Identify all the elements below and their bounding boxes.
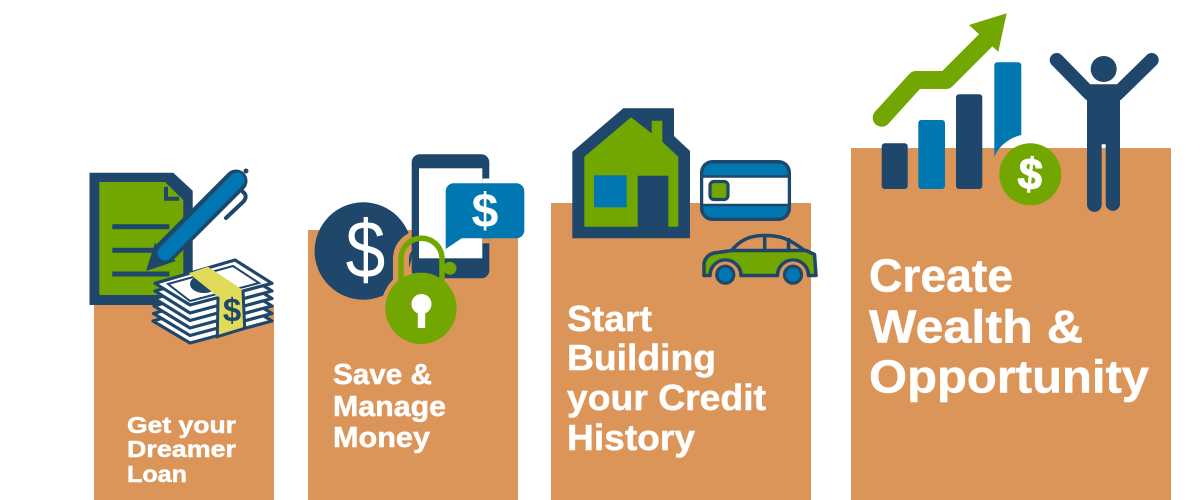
icon: stack of cash: [153, 260, 272, 343]
step 2 panel: Save & Manage Money: [308, 154, 524, 500]
label: Get your Dreamer Loan: Get your: [127, 412, 236, 438]
icon: document: [90, 173, 193, 305]
icon: person with raised arms: [1057, 56, 1152, 212]
icon: dollar coin: $: [1016, 149, 1045, 200]
label: Save & Manage Money: [333, 359, 446, 454]
icon: car: [704, 236, 816, 288]
label: Start Building your Credit History: Start: [567, 298, 652, 339]
label: Save & Manage Money: Manage: [333, 391, 446, 423]
label: Get your Dreamer Loan: Dreamer: [127, 436, 236, 462]
label: Save & Manage Money: Money: [333, 422, 430, 454]
icon: padlock: [385, 238, 457, 344]
label: Create Wealth & Opportunity: Opportunity: [869, 350, 1149, 402]
label: Start Building your Credit History: Building: [567, 337, 716, 378]
label: Start Building your Credit History: [567, 298, 766, 458]
step 3 panel: Start Building your Credit History: [551, 108, 816, 500]
icon: speech bubble: [446, 178, 524, 249]
label: Create Wealth & Opportunity: [869, 250, 1149, 402]
label: Start Building your Credit History: History: [567, 417, 695, 458]
icon: dollar on band: $: [223, 292, 241, 328]
icon: speech bubble: $: [472, 185, 499, 238]
icon: phone: [412, 154, 489, 278]
arrow: rising trend: [882, 13, 1007, 118]
step 4 panel: Create Wealth & Opportunity: [851, 13, 1171, 500]
icon: dollar coin: [999, 143, 1061, 205]
icon: dollar coin: $: [346, 204, 385, 296]
label: Start Building your Credit History: your Credit: [567, 377, 766, 418]
label: Get your Dreamer Loan: [127, 412, 236, 487]
icon: credit card: [702, 162, 789, 219]
icon: bar chart: [882, 62, 1021, 189]
icon: dollar coin: [315, 202, 461, 348]
icon: pen: [146, 168, 248, 271]
label: Get your Dreamer Loan: Loan: [127, 461, 187, 487]
label: Create Wealth & Opportunity: Create: [869, 250, 1013, 302]
label: Create Wealth & Opportunity: Wealth &: [869, 300, 1083, 352]
icon: house: [572, 108, 690, 238]
step 1 panel: Get your Dreamer Loan: [90, 168, 274, 500]
label: Save & Manage Money: Save &: [333, 359, 432, 391]
